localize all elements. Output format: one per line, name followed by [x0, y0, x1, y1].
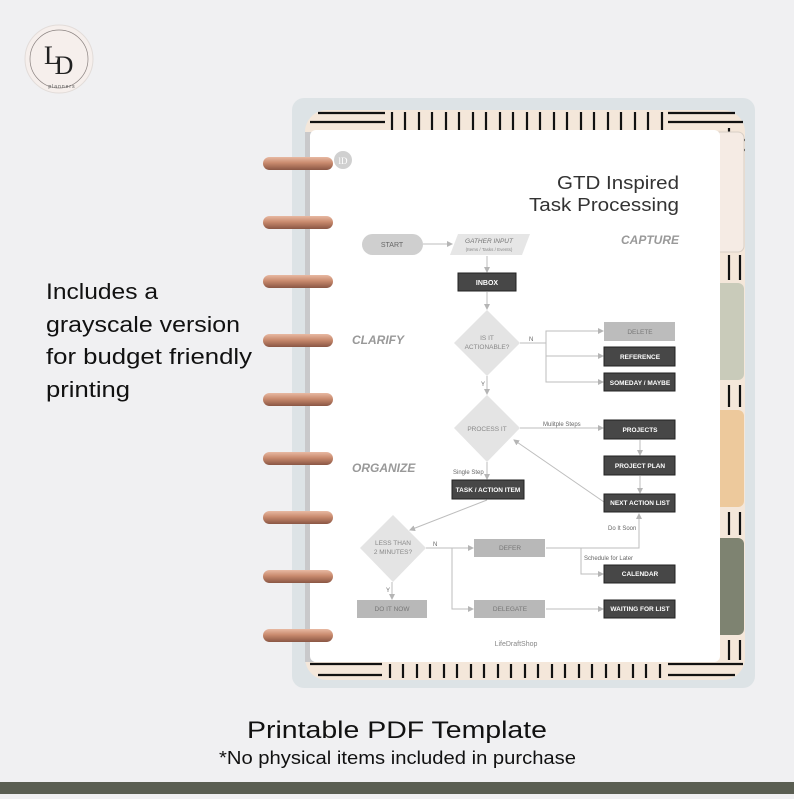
left text block: for budget friendly	[46, 344, 252, 369]
gather input	[450, 234, 530, 255]
planner	[292, 98, 755, 688]
gather input: (Items / Tasks / Events)	[466, 247, 513, 252]
section labels: ORGANIZE	[352, 461, 416, 475]
boxes: DELEGATE	[493, 606, 528, 613]
text: N	[433, 542, 437, 548]
boxes: DO IT NOW	[375, 606, 410, 613]
left text block: printing	[46, 377, 130, 402]
section labels: CLARIFY	[352, 333, 405, 347]
page logo	[334, 151, 352, 169]
page title: GTD Inspired	[557, 173, 679, 193]
start node: START	[381, 242, 404, 249]
text: Do It Soon	[608, 526, 636, 532]
diamonds: ACTIONABLE?	[465, 344, 510, 351]
inbox: INBOX	[476, 280, 498, 287]
connectors	[392, 244, 640, 609]
boxes: DELETE	[627, 329, 653, 336]
bottom caption: *No physical items included in purchase	[219, 748, 576, 768]
text: Y	[481, 382, 485, 388]
boxes: TASK / ACTION ITEM	[456, 487, 520, 494]
boxes: WAITING FOR LIST	[610, 606, 670, 613]
section labels	[352, 233, 680, 475]
inbox	[458, 273, 516, 291]
gather input: GATHER INPUT	[465, 238, 514, 245]
text: Mulitple Steps	[543, 422, 581, 428]
diamonds	[454, 310, 520, 376]
text: Y	[386, 588, 390, 594]
footer brand: LifeDraftShop	[495, 641, 538, 648]
boxes: CALENDAR	[622, 571, 659, 578]
page title: Task Processing	[529, 195, 679, 215]
boxes: SOMEDAY / MAYBE	[610, 380, 671, 387]
logo	[25, 25, 93, 93]
boxes: PROJECT PLAN	[615, 463, 665, 470]
bottom caption	[219, 717, 576, 768]
text: LESS THAN	[375, 540, 411, 547]
diamonds: IS IT	[480, 335, 494, 342]
rings	[263, 157, 333, 642]
text: Single Step	[453, 470, 484, 476]
start node	[362, 234, 423, 255]
text: Schedule for Later	[584, 556, 633, 562]
tabs	[714, 132, 744, 252]
left text block	[46, 279, 252, 402]
logo: L	[44, 41, 60, 70]
boxes: DEFER	[499, 545, 521, 552]
page title	[529, 173, 679, 215]
boxes	[357, 322, 675, 618]
logo: D	[55, 51, 73, 80]
text: 2 MINUTES?	[374, 549, 413, 556]
text: N	[529, 337, 533, 343]
page logo: lD	[338, 156, 348, 166]
logo: planners	[48, 84, 76, 90]
boxes: NEXT ACTION LIST	[610, 500, 670, 507]
left text block: grayscale version	[46, 312, 240, 337]
text: PROCESS IT	[467, 426, 507, 433]
left text block: Includes a	[46, 279, 159, 304]
section labels: CAPTURE	[621, 233, 680, 247]
bottom caption: Printable PDF Template	[247, 717, 547, 744]
bottom bar	[0, 782, 794, 794]
boxes: PROJECTS	[622, 427, 658, 434]
boxes: REFERENCE	[620, 354, 661, 361]
